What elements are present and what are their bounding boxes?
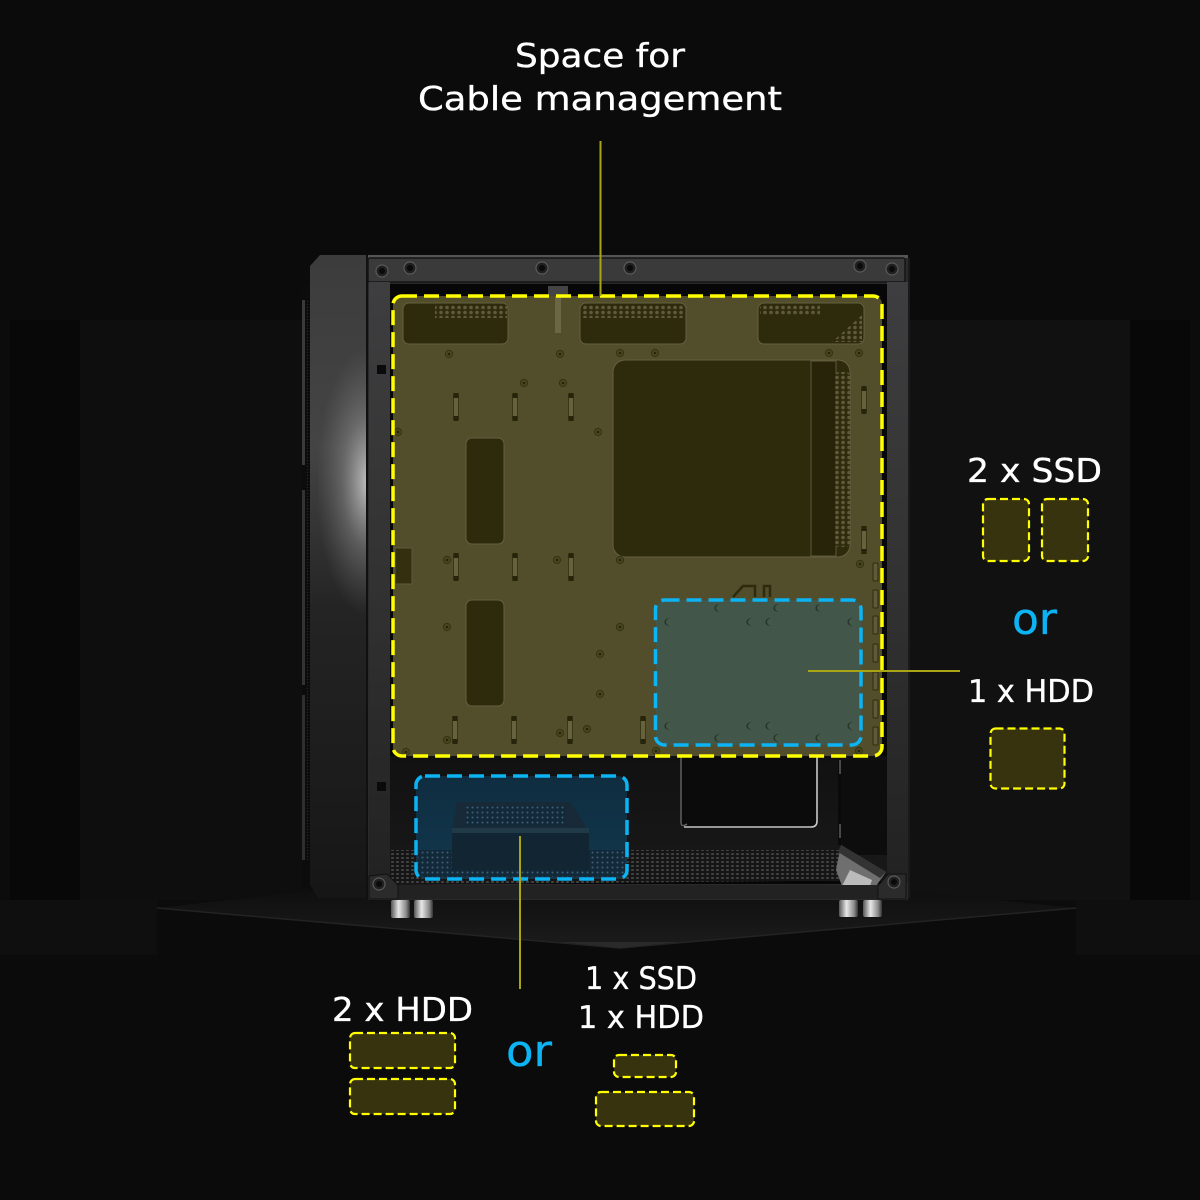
cable tie slots bbox=[452, 386, 866, 744]
label: 1 x SSD 1 x HDD: 1 x SSD bbox=[585, 961, 697, 997]
feet bbox=[391, 900, 882, 918]
label group: lower storage options bbox=[332, 961, 704, 1126]
side fan mesh bbox=[302, 282, 318, 888]
icon: one HDD bbox=[990, 728, 1064, 788]
icons: two SSDs bbox=[983, 499, 1088, 561]
icons: SSD and HDD bbox=[596, 1055, 694, 1126]
case frame bbox=[368, 255, 910, 900]
heading: cable management bbox=[418, 36, 782, 118]
floor mesh bbox=[390, 850, 880, 885]
label: 1 x SSD 1 x HDD: 1 x HDD bbox=[578, 1000, 704, 1036]
dashed blue outline bbox=[416, 776, 627, 879]
pedestal bbox=[157, 890, 1076, 1200]
heading: cable management: Cable management bbox=[418, 79, 782, 118]
lower compartment bbox=[390, 756, 887, 881]
icons: two HDDs bbox=[350, 1033, 455, 1114]
dashed yellow outline: cable management area bbox=[393, 296, 882, 756]
bottom rail bbox=[369, 874, 906, 899]
lower drive bay zone bbox=[416, 776, 627, 879]
dashed blue outline bbox=[656, 600, 861, 745]
or: or bbox=[506, 1026, 553, 1077]
rear cutouts bbox=[466, 438, 504, 706]
cable clips right edge bbox=[873, 563, 878, 745]
hdd cage bbox=[452, 802, 589, 870]
logo stamp bbox=[733, 586, 770, 597]
label: 1 x SSD 1 x HDD bbox=[578, 961, 704, 1036]
or: or bbox=[1012, 594, 1058, 645]
psu window bbox=[681, 757, 817, 828]
top bolts bbox=[376, 260, 898, 277]
standoff screws bbox=[394, 349, 864, 756]
space for cable management: olive motherboard tray bbox=[393, 286, 882, 756]
leader line: right drive bay bbox=[808, 670, 960, 672]
label: 2 x SSD: 2 x SSD bbox=[967, 451, 1102, 490]
mount holes bbox=[664, 604, 855, 742]
cpu cutout bbox=[613, 360, 850, 557]
leader line: lower drive bay bbox=[519, 836, 521, 989]
label: 2 x HDD: 2 x HDD bbox=[332, 990, 473, 1029]
drive bay zone behind tray bbox=[656, 600, 861, 745]
corner bracket bbox=[836, 845, 886, 886]
top cutouts bbox=[403, 303, 864, 344]
leader line: cable management bbox=[600, 141, 602, 296]
heading: cable management: Space for bbox=[515, 36, 685, 75]
cable post bbox=[548, 286, 568, 333]
computer case bbox=[302, 255, 910, 918]
label group: right storage options bbox=[967, 451, 1102, 788]
label: 1 x HDD: 1 x HDD bbox=[968, 674, 1094, 710]
front panel bbox=[310, 255, 368, 898]
cutout mesh strips bbox=[435, 305, 862, 342]
left edge tab bbox=[395, 548, 412, 584]
